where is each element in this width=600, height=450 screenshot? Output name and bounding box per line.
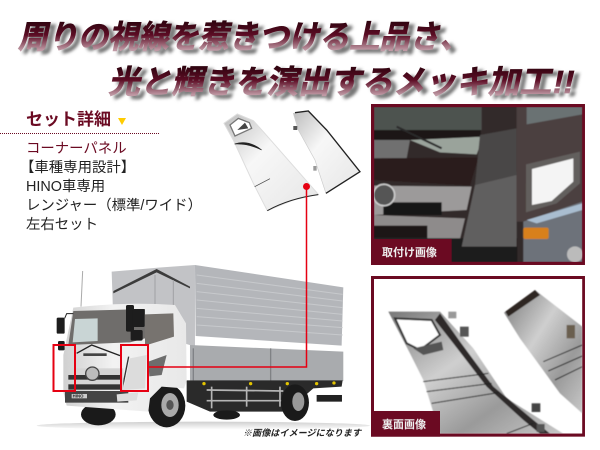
label: reverse side image: 裏面画像 xyxy=(382,417,426,431)
panel: installed photo xyxy=(371,104,585,265)
product description: レンジャー（標準/ワイド） xyxy=(26,197,202,214)
product description: 左右セット xyxy=(26,216,98,233)
red highlight box left xyxy=(54,345,75,391)
product description: コーナーパネル xyxy=(26,140,127,157)
cab xyxy=(63,304,187,412)
truck illustration xyxy=(37,265,370,430)
red highlight box right xyxy=(121,345,148,391)
set details text block xyxy=(0,109,202,233)
image note: ※画像はイメージになります xyxy=(243,428,362,438)
cab: HINO xyxy=(73,394,84,399)
icon: yellow triangle xyxy=(118,118,126,125)
label: reverse side image xyxy=(371,411,440,437)
title line 2: 光と輝きを演出するメッキ加工!! xyxy=(107,64,578,100)
title line 2: 光と輝きを演出するメッキ加工!! xyxy=(112,67,583,103)
mirrors xyxy=(57,305,145,350)
product description: 【車種専用設計】 xyxy=(20,159,135,176)
chassis and rails xyxy=(187,380,343,412)
product description xyxy=(20,140,202,233)
heading: set details: セット詳細 xyxy=(26,109,111,129)
product description: HINO車専用 xyxy=(26,178,105,195)
label: installed image xyxy=(371,239,452,265)
red callout line xyxy=(148,183,310,367)
label: installed image: 取付け画像 xyxy=(382,245,437,259)
title line 1: 周りの視線を惹きつける上品さ、 xyxy=(21,22,481,58)
panel: reverse side photo xyxy=(371,276,585,437)
wheels xyxy=(81,384,309,427)
title xyxy=(16,19,583,103)
product photo: chrome corner panels xyxy=(224,111,360,211)
cargo box xyxy=(112,265,343,381)
title line 1: 周りの視線を惹きつける上品さ、 xyxy=(16,19,476,55)
antenna xyxy=(81,271,83,307)
